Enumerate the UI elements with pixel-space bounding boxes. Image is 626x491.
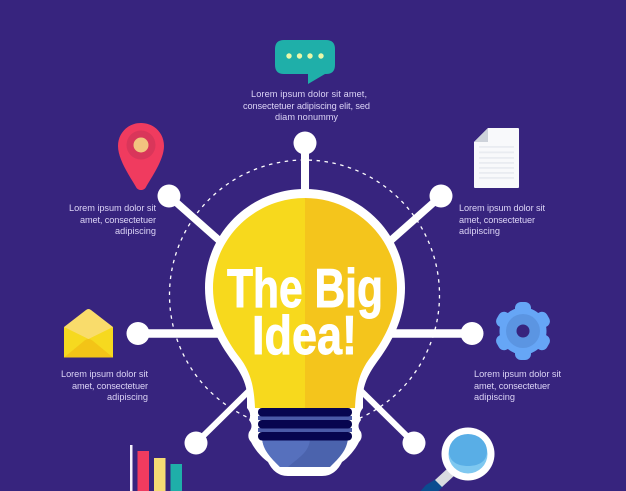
- icon: bar chart: [130, 445, 182, 491]
- title: The Big: [227, 257, 383, 319]
- text: top: consectetuer adipiscing elit, sed: [243, 101, 370, 111]
- text: upper right: Lorem ipsum dolor sit: [459, 203, 545, 213]
- text: lower left: adipiscing: [107, 392, 148, 402]
- text: upper right: amet, consectetuer: [459, 215, 535, 225]
- text: top: diam nonummy: [275, 112, 338, 122]
- text: lower right: adipiscing: [474, 392, 515, 402]
- text: lower left: Lorem ipsum dolor sit: [61, 369, 148, 379]
- text: upper right: adipiscing: [459, 226, 500, 236]
- text: lower right: Lorem ipsum dolor sit: [474, 369, 561, 379]
- text: lower right: [474, 369, 561, 402]
- text: upper left: Lorem ipsum dolor sit: [69, 203, 156, 213]
- bulb screw bands: [258, 408, 352, 440]
- bulb white outline: [205, 189, 405, 476]
- text: lower right: amet, consectetuer: [474, 381, 550, 391]
- text: lower left: [61, 369, 148, 402]
- text: upper left: adipiscing: [115, 226, 156, 236]
- light bulb: [205, 189, 405, 476]
- text: upper right: [459, 203, 545, 236]
- bulb base blue: [262, 438, 348, 467]
- text: top: Lorem ipsum dolor sit amet,: [251, 89, 367, 99]
- icon: map pin: [118, 123, 164, 190]
- icon: document: [474, 128, 519, 188]
- text: top: [243, 89, 370, 122]
- text: upper left: [69, 203, 156, 236]
- icon: magnifying glass: [417, 428, 494, 491]
- connector spokes and nodes: [126, 132, 484, 454]
- bulb glass left half: [213, 198, 305, 408]
- bulb glass right half: [305, 198, 397, 408]
- text: lower left: amet, consectetuer: [72, 381, 148, 391]
- icon: gear: [494, 302, 552, 360]
- title: [227, 257, 383, 366]
- text: upper left: amet, consectetuer: [80, 215, 156, 225]
- icon: speech bubble: [275, 40, 335, 84]
- title: Idea!: [252, 304, 357, 366]
- icon: envelope: [64, 309, 113, 358]
